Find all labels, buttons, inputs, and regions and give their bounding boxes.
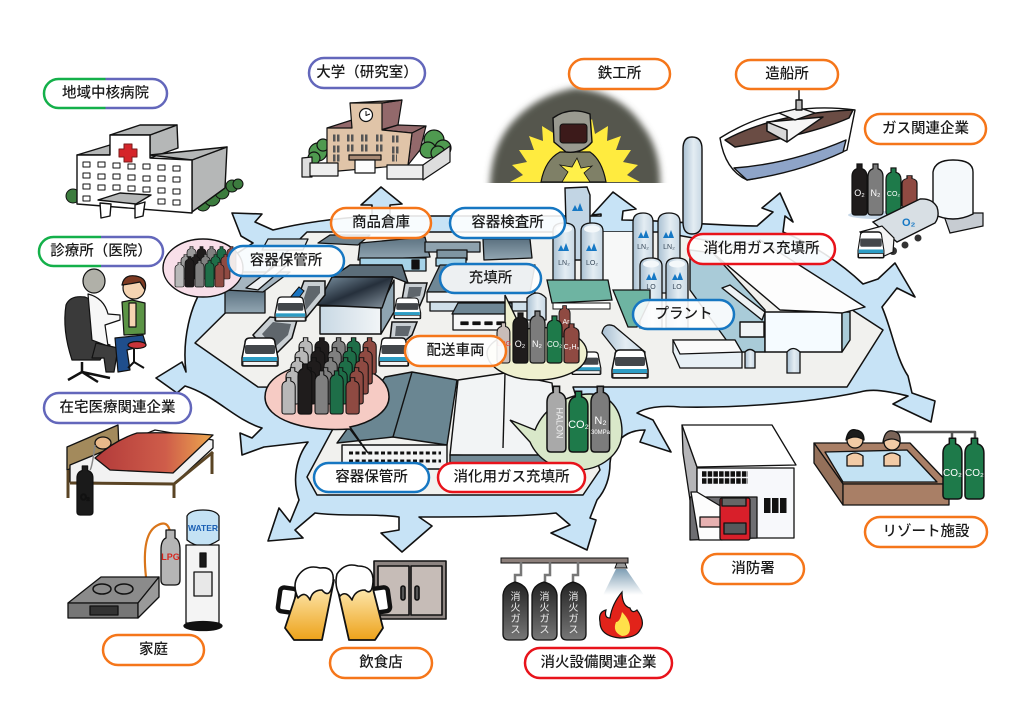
- bubble: filling gases: N₂: [532, 339, 542, 349]
- plant: green roofs: [547, 280, 650, 327]
- plant: storage tanks LN2 LO2: LO₂: [586, 260, 598, 267]
- household illustration: stove, LPG, water server: LPG: [161, 552, 180, 562]
- label: 造船所: 造船所: [765, 66, 809, 82]
- label: プラント: プラント: [654, 306, 712, 322]
- label: 商品倉庫: 商品倉庫: [352, 214, 410, 231]
- welder illustration: [490, 88, 660, 190]
- label: 容器保管所 (lower): [314, 463, 429, 492]
- plant: rear tanks: LO: [646, 284, 656, 291]
- label: 診療所（医院）: [39, 237, 163, 266]
- household illustration: stove, LPG, water server: [68, 510, 222, 630]
- label: 容器保管所 (lower): 容器保管所: [335, 468, 408, 486]
- bubble: filling gases: LPG: [497, 341, 511, 348]
- label: 消化用ガス充填所 (plant): 消化用ガス充填所: [704, 239, 820, 257]
- bubble: filling gases: C₂H₆: [564, 344, 579, 351]
- bubble: extinguishing gases: [510, 386, 622, 470]
- label: ガス関連企業: [865, 114, 986, 144]
- label: 在宅医療関連企業: [44, 393, 191, 423]
- label: 消化用ガス充填所 (plant): [688, 234, 835, 264]
- tanker and van: [572, 325, 648, 378]
- gas company illustration: cylinders, tanker, tank: N₂: [870, 188, 881, 198]
- label: 配送車両: 配送車両: [426, 342, 484, 359]
- flow arrows: gas distribution band: [156, 187, 935, 552]
- plant: small annex building and tanks: [673, 340, 800, 373]
- bubble: cylinder storage (large): [265, 338, 389, 453]
- bed illustration with oxygen cylinder: O₂: [80, 493, 90, 502]
- label: 大学（研究室）: [309, 58, 425, 88]
- label: 消火設備関連企業: [525, 648, 672, 678]
- fire extinguishing equipment illustration: ガ: [540, 613, 550, 625]
- resort illustration: bath and CO2 cylinders: CO₂: [943, 468, 962, 479]
- bubble: extinguishing gases: 30MPa: [591, 430, 611, 436]
- label: 消火設備関連企業: 消火設備関連企業: [540, 654, 657, 671]
- bubble: extinguishing gases: N₂: [594, 415, 607, 427]
- plant: storage tanks LN2 LO2: LN₂: [558, 260, 570, 267]
- bed illustration with oxygen cylinder: [67, 425, 213, 515]
- gas company illustration: cylinders, tanker, tank: O₂: [854, 188, 865, 198]
- label: 家庭: [103, 635, 204, 665]
- label: 容器検査所: [450, 208, 565, 238]
- lower right building: extinguishing gas filling: [450, 373, 562, 469]
- plant: rear tanks: LN₂: [663, 244, 675, 251]
- label: 消化用ガス充填所 (lower): [438, 463, 585, 492]
- fire extinguishing equipment illustration: ガ: [510, 613, 520, 625]
- plant: rear tanks: [633, 213, 688, 328]
- label: 鉄工所: 鉄工所: [598, 65, 642, 82]
- gas company illustration: cylinders, tanker, tank: O₂: [902, 217, 916, 229]
- label: 消防署: 消防署: [731, 560, 775, 577]
- bubble: filling gases: O₂: [515, 339, 526, 349]
- hospital illustration: [66, 125, 243, 218]
- label: 地域中核病院: [44, 79, 167, 108]
- label: 飲食店: 飲食店: [359, 654, 403, 671]
- bubble: filling gases: [487, 295, 587, 380]
- fire station illustration: [682, 425, 796, 540]
- bubble: cylinder storage (small, upper left): [163, 239, 243, 297]
- plant: rear tanks: LN₂: [637, 244, 649, 251]
- label: リゾート施設: [865, 517, 987, 547]
- label: 造船所: [736, 60, 838, 89]
- fire extinguishing equipment illustration: 火: [540, 602, 550, 614]
- bubble: filling gases: Ar: [562, 319, 570, 326]
- plant: tall tower: [565, 187, 590, 260]
- resort illustration: bath and CO2 cylinders: [814, 430, 984, 505]
- fire extinguishing equipment illustration: ス: [510, 625, 520, 636]
- label: 充填所: [440, 264, 541, 293]
- bubble: extinguishing gases: CO₂: [568, 419, 589, 431]
- label: 在宅医療関連企業: 在宅医療関連企業: [60, 399, 176, 416]
- label: 大学（研究室）: 大学（研究室）: [316, 64, 418, 81]
- fire extinguishing equipment illustration: [501, 558, 644, 640]
- household illustration: stove, LPG, water server: WATER: [188, 523, 218, 533]
- label: 飲食店: [330, 648, 432, 678]
- fire extinguishing equipment illustration: 火: [568, 602, 578, 614]
- factory ground: [195, 232, 883, 495]
- filling building: [427, 265, 546, 330]
- fire extinguishing equipment illustration: 消: [510, 590, 520, 603]
- warehouses top row: [225, 235, 532, 313]
- gas company illustration: cylinders, tanker, tank: CO₂: [887, 191, 900, 198]
- label: 消防署: [702, 554, 804, 584]
- label: プラント: [633, 300, 734, 329]
- plant: storage tanks LN2 LO2: [553, 223, 603, 293]
- label: 消化用ガス充填所 (lower): 消化用ガス充填所: [454, 468, 570, 486]
- label: リゾート施設: リゾート施設: [882, 523, 970, 540]
- label: 配送車両: [405, 336, 506, 366]
- fire extinguishing equipment illustration: 火: [510, 602, 520, 614]
- plant: rear tanks: LO: [672, 284, 682, 291]
- label: 容器検査所: 容器検査所: [471, 214, 544, 231]
- label: 容器保管所 (upper): 容器保管所: [250, 251, 323, 269]
- university illustration: [302, 100, 451, 180]
- lower left building: container storage: [337, 372, 457, 469]
- clinic illustration: doctor and patient: [65, 269, 146, 382]
- label: 容器保管所 (upper): [228, 246, 344, 276]
- restaurant illustration: beer mugs and cabinet: [277, 561, 446, 640]
- label: 鉄工所: [569, 59, 670, 89]
- label: 診療所（医院）: 診療所（医院）: [50, 242, 152, 260]
- label: ガス関連企業: ガス関連企業: [882, 120, 969, 137]
- delivery trucks: [242, 281, 427, 366]
- fire extinguishing equipment illustration: 消: [568, 590, 578, 603]
- gas company illustration: cylinders, tanker, tank: [848, 160, 983, 258]
- plant: large white building: [690, 240, 865, 352]
- central warehouse: [317, 265, 408, 334]
- bubble: extinguishing gases: HALON: [554, 407, 564, 439]
- bubble: filling gases: CO₂: [547, 340, 562, 349]
- fire extinguishing equipment illustration: 消: [540, 590, 550, 603]
- fire extinguishing equipment illustration: ス: [540, 625, 550, 636]
- label: 充填所: 充填所: [469, 268, 513, 286]
- resort illustration: bath and CO2 cylinders: CO₂: [965, 468, 984, 479]
- plant: chimney: [683, 137, 702, 234]
- label: 家庭: 家庭: [139, 641, 168, 658]
- fire extinguishing equipment illustration: ス: [568, 625, 578, 636]
- shipbuilding illustration: [720, 90, 855, 180]
- label: 地域中核病院: 地域中核病院: [62, 84, 149, 102]
- fire extinguishing equipment illustration: ガ: [568, 613, 578, 625]
- label: 商品倉庫: [331, 208, 431, 238]
- plant: white backdrop behind tanks: [590, 232, 640, 302]
